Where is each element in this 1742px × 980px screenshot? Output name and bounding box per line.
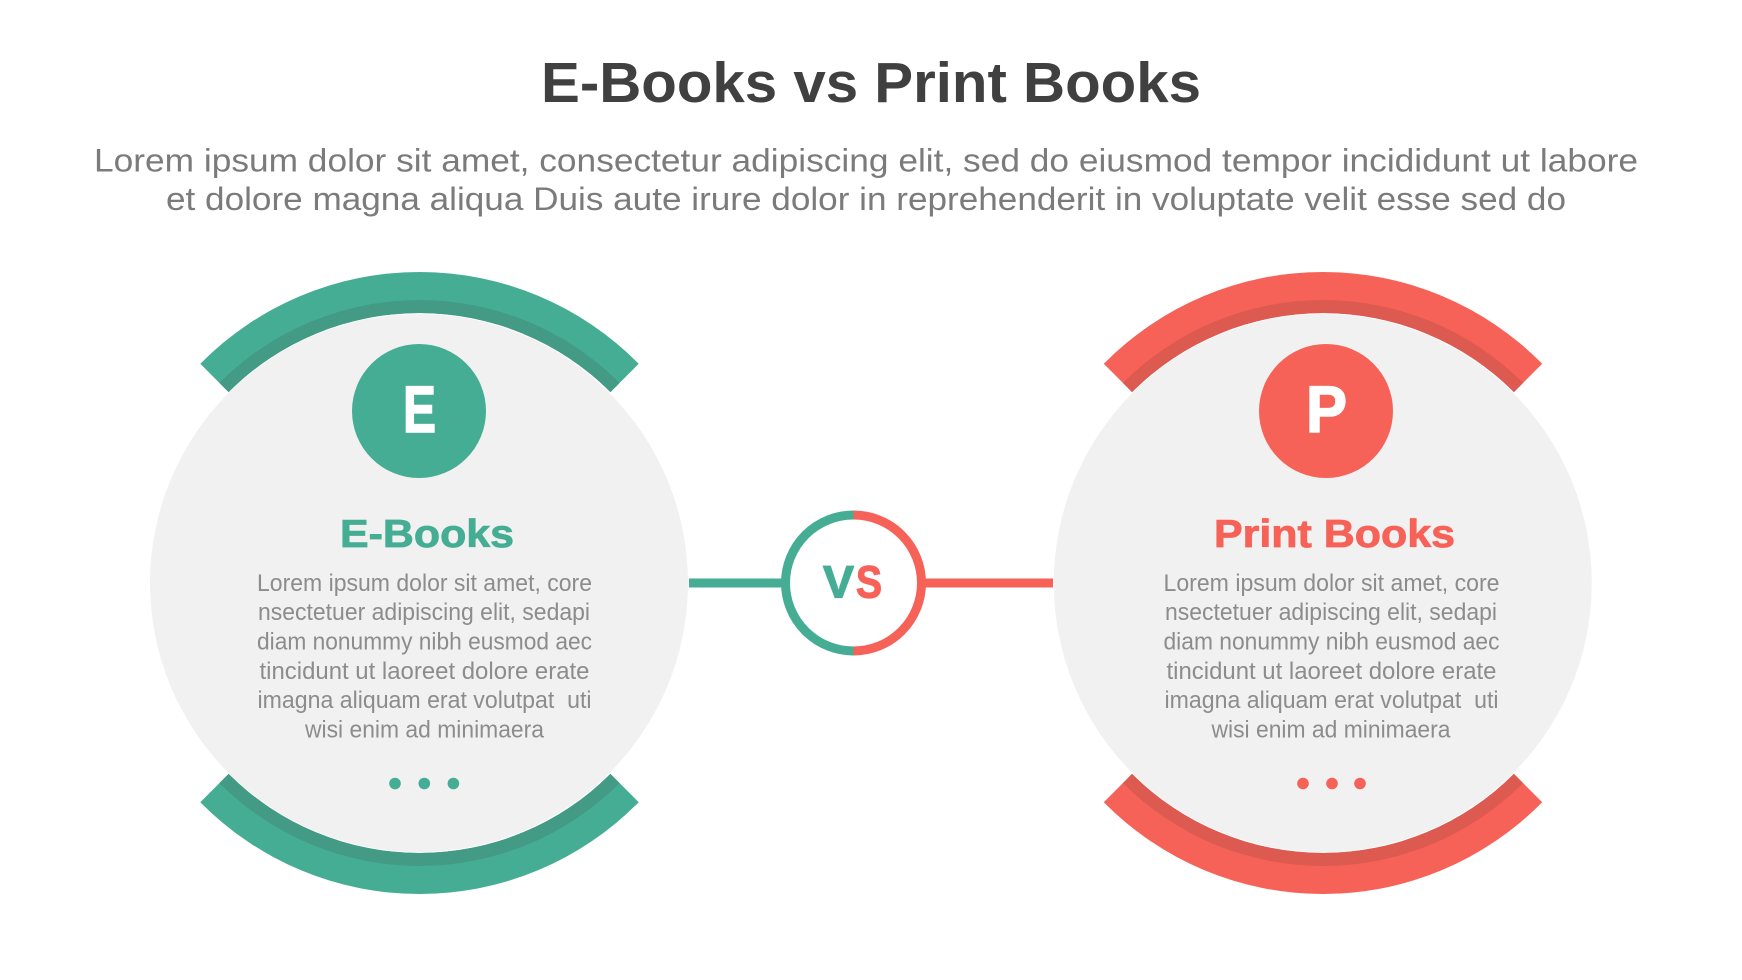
three dots	[389, 778, 459, 789]
icon: P badge	[1259, 344, 1393, 478]
icon: P badge: P	[1306, 372, 1347, 446]
VS letter S: S	[856, 556, 882, 608]
connector line: green	[689, 578, 785, 588]
ring: red half	[854, 515, 922, 651]
subtitle text block	[94, 142, 1638, 217]
bottom arc	[200, 774, 639, 894]
VS letter V: V	[823, 556, 854, 608]
body text: nsectetuer adipiscing elit, sedapi	[1165, 599, 1497, 626]
body text: imagna aliquam erat volutpat uti	[1164, 687, 1498, 714]
body text: nsectetuer adipiscing elit, sedapi	[258, 599, 590, 626]
body text: Lorem ipsum dolor sit amet, core	[257, 570, 592, 597]
top arc	[200, 272, 639, 392]
body text: wisi enim ad minimaera	[1211, 716, 1451, 744]
body text: diam nonummy nibh eusmod aec	[1164, 628, 1500, 656]
grey circle	[1054, 314, 1592, 852]
VS badge	[786, 515, 922, 651]
body text: Lorem ipsum dolor sit amet, core	[1164, 570, 1500, 597]
heading: E-Books: E-Books	[340, 513, 514, 556]
icon: E badge	[352, 344, 486, 478]
heading: Print Books: Print Books	[1214, 513, 1455, 556]
body text: diam nonummy nibh eusmod aec	[257, 628, 592, 656]
body text: wisi enim ad minimaera	[304, 716, 544, 744]
panel: E-Books	[150, 272, 688, 894]
grey circle	[150, 314, 688, 852]
title: E-Books vs Print Books	[541, 51, 1201, 115]
body text	[1164, 570, 1500, 744]
body text: tincidunt ut laoreet dolore erate	[1166, 658, 1496, 685]
connector line: red	[923, 578, 1053, 588]
body text: imagna aliquam erat volutpat uti	[258, 687, 592, 714]
panel: Print Books	[1054, 272, 1592, 894]
bottom arc	[1104, 774, 1542, 894]
body text: tincidunt ut laoreet dolore erate	[260, 658, 590, 685]
subtitle text block: et dolore magna aliqua Duis aute irure dolor in reprehenderit in voluptate velit esse sed do	[166, 181, 1566, 217]
icon: E badge: E	[403, 372, 436, 446]
ring: green half	[786, 515, 854, 651]
top arc	[1104, 272, 1542, 392]
three dots	[1297, 778, 1366, 789]
body text	[257, 570, 592, 744]
subtitle text block: Lorem ipsum dolor sit amet, consectetur adipiscing elit, sed do eiusmod tempor incididunt ut labore	[94, 142, 1638, 178]
